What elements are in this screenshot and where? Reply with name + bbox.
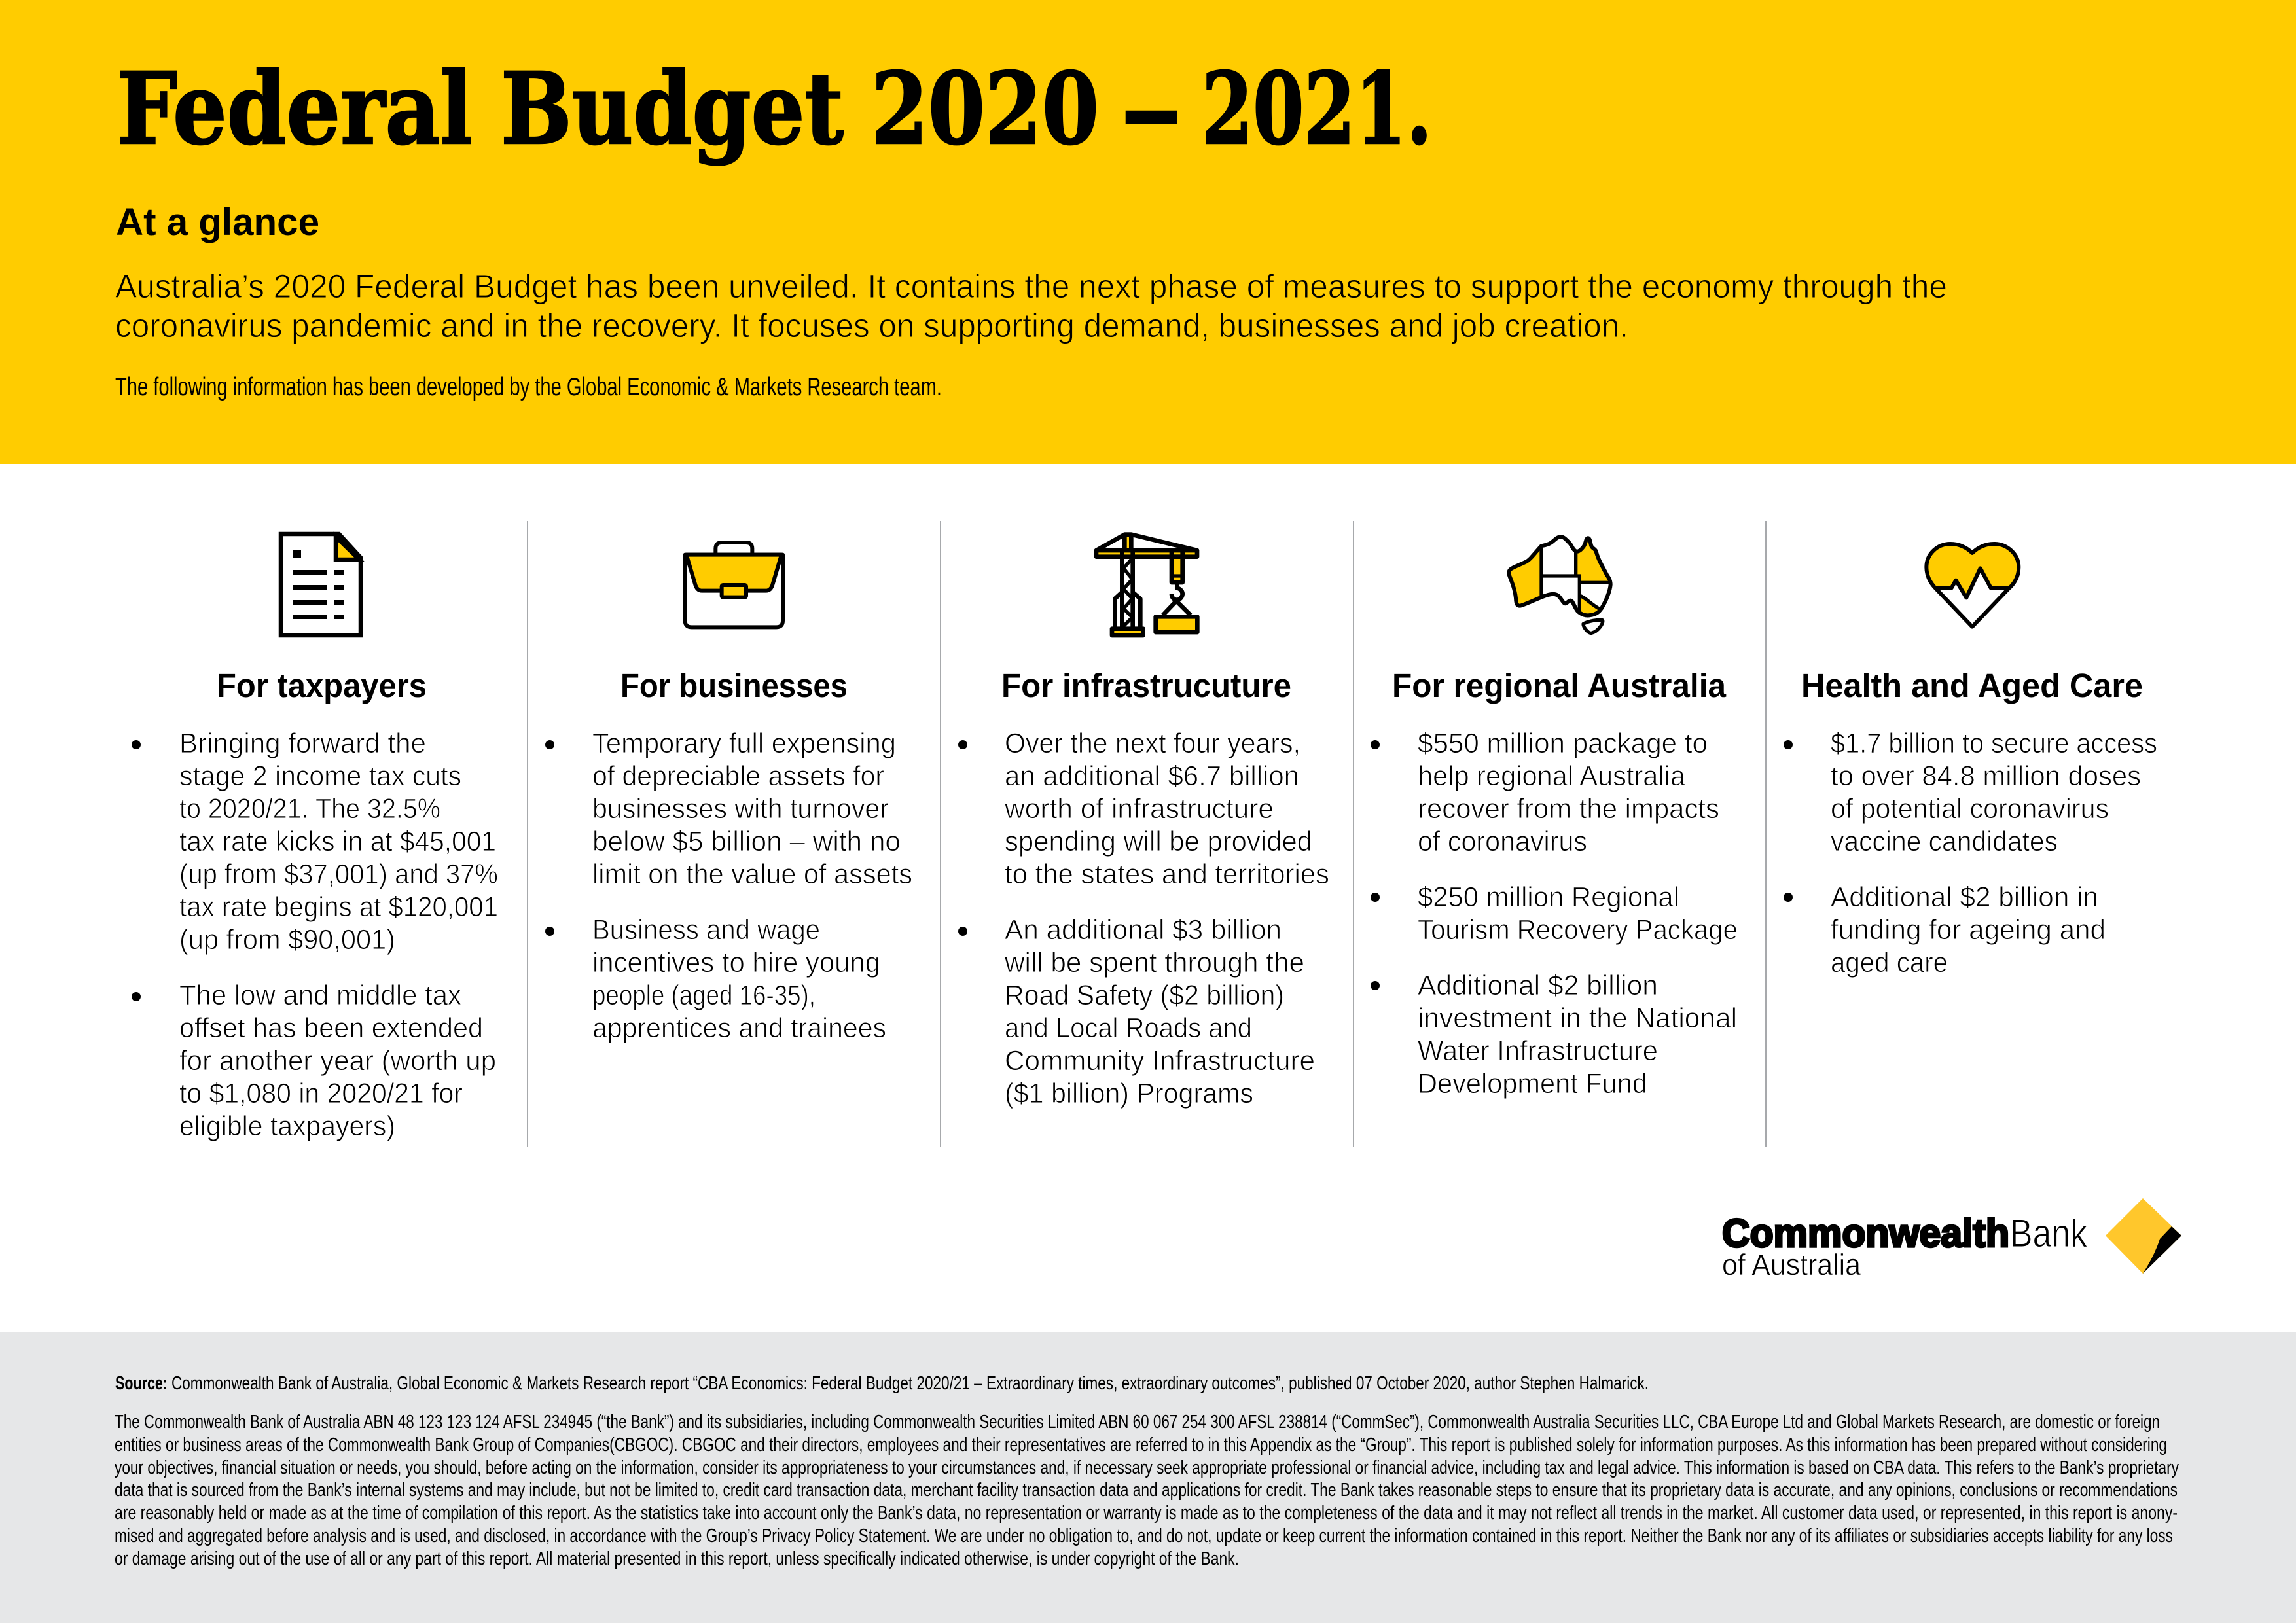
bullet list: Water Infrastructure	[1418, 1035, 1658, 1067]
bullet list: help regional Australia	[1418, 760, 1685, 792]
bullet list: spending will be provided	[1005, 826, 1312, 857]
heading: For businesses	[620, 667, 848, 704]
intro paragraph: coronavirus pandemic and in the recovery. It focuses on supporting demand, businesses and job creation.	[115, 307, 1628, 344]
bullet list: of depreciable assets for	[592, 760, 884, 792]
footer panel	[0, 1332, 2296, 1623]
legal disclaimer	[115, 1412, 2179, 1569]
bullet list: $550 million package to	[1418, 728, 1708, 759]
bullet list	[545, 728, 912, 1044]
bullet list: (up from $90,001)	[179, 924, 395, 955]
bullet list: incentives to hire young	[592, 947, 880, 978]
subtitle: At a glance	[116, 201, 319, 243]
bullet list: of coronavirus	[1418, 826, 1587, 857]
bullet list: Business and wage	[592, 914, 820, 946]
title: 2021.	[1202, 50, 1432, 167]
legal disclaimer: or damage arising out of the use of all or any part of this report. All material presented in this report, unless specifically indicated otherwise, is under copyright of the Bank.	[115, 1548, 1239, 1569]
icon: map of Australia	[1509, 537, 1611, 633]
bullet list: will be spent through the	[1004, 947, 1304, 978]
bullet list: worth of infrastructure	[1004, 793, 1274, 825]
bullet list: stage 2 income tax cuts	[179, 760, 461, 792]
bullet list: businesses with turnover	[592, 793, 889, 825]
panel: for infrastructure	[958, 535, 1329, 1109]
bullet list: apprentices and trainees	[592, 1012, 886, 1044]
bullet list: of potential coronavirus	[1831, 793, 2109, 825]
bullet list: recover from the impacts	[1418, 793, 1719, 825]
title: Federal	[117, 50, 473, 167]
bullet list: Bringing forward the	[179, 728, 426, 759]
bullet list: Tourism Recovery Package	[1418, 914, 1738, 946]
bullet list: The low and middle tax	[179, 980, 461, 1011]
bullet list: and Local Roads and	[1005, 1012, 1252, 1044]
bullet list: Temporary full expensing	[592, 728, 896, 759]
bullet list: offset has been extended	[179, 1012, 483, 1044]
bullet list: An additional $3 billion	[1005, 914, 1282, 946]
panel: for businesses	[545, 543, 912, 1044]
bullet list: to 2020/21. The 32.5%	[179, 793, 440, 825]
icon: crane with load	[1096, 535, 1197, 635]
bullet list	[1371, 728, 1738, 1099]
bullet list: aged care	[1831, 947, 1948, 978]
heading: For regional Australia	[1392, 667, 1727, 704]
attribution note: The following information has been developed by the Global Economic & Markets Research team.	[115, 373, 942, 401]
panel: for taxpayers	[132, 534, 498, 1142]
source line: Source:	[115, 1373, 168, 1394]
bullet list: $1.7 billion to secure access	[1831, 728, 2157, 759]
bullet list: Community Infrastructure	[1005, 1045, 1315, 1077]
bullet list: Additional $2 billion in	[1831, 882, 2098, 913]
icon: heart with pulse	[1926, 544, 2018, 627]
icon: document	[281, 534, 361, 635]
logo wordmark: of Australia	[1722, 1248, 1861, 1281]
icon: briefcase	[685, 543, 783, 627]
source line: Commonwealth Bank of Australia, Global Economic & Markets Research report “CBA Economics: Federal Budget 2020/21 – Extraordinary times, extraordinary outcomes”, published 07 October 2020, author Stephen Halmarick.	[171, 1373, 1649, 1394]
bullet list: funding for ageing and	[1831, 914, 2106, 946]
bullet list: tax rate begins at $120,001	[179, 891, 498, 923]
bullet list: Additional $2 billion	[1418, 970, 1658, 1001]
bullet list	[1784, 728, 2157, 978]
logo wordmark	[1722, 1211, 2088, 1281]
intro paragraph	[115, 268, 1947, 344]
panel: health and aged care	[1784, 544, 2157, 978]
bullet list: eligible taxpayers)	[179, 1111, 395, 1142]
bullet list: investment in the National	[1418, 1003, 1737, 1034]
bullet list: for another year (worth up	[179, 1045, 496, 1077]
title: –	[1120, 50, 1183, 167]
bullet list: an additional $6.7 billion	[1005, 760, 1299, 792]
bullet list: Road Safety ($2 billion)	[1005, 980, 1284, 1011]
panel: for regional Australia	[1371, 537, 1738, 1099]
bullet list: to $1,080 in 2020/21 for	[179, 1078, 463, 1109]
heading: Health and Aged Care	[1801, 667, 2143, 704]
bullet list: vaccine candidates	[1831, 826, 2058, 857]
bullet list: limit on the value of assets	[592, 859, 912, 890]
bullet list: (up from $37,001) and 37%	[179, 859, 498, 890]
logo wordmark: Bank	[2010, 1211, 2088, 1255]
title: 2020	[871, 50, 1099, 167]
bullet list: to the states and territories	[1005, 859, 1329, 890]
header banner	[0, 0, 2296, 464]
bullet list: below $5 billion – with no	[592, 826, 901, 857]
heading: For taxpayers	[217, 667, 427, 704]
bullet list: $250 million Regional	[1418, 882, 1679, 913]
logo wordmark: Commonwealth	[1722, 1211, 2009, 1255]
logo: Commonwealth Bank of Australia	[1722, 1198, 2181, 1281]
title: Budget	[501, 50, 844, 167]
bullet list: tax rate kicks in at $45,001	[179, 826, 496, 857]
bullet list: Over the next four years,	[1005, 728, 1300, 759]
bullet list: people (aged 16-35),	[592, 980, 816, 1011]
intro paragraph: Australia’s 2020 Federal Budget has been unveiled. It contains the next phase of measures to support the economy through the	[115, 268, 1947, 305]
logo diamond	[2106, 1198, 2181, 1274]
bullet list: ($1 billion) Programs	[1005, 1078, 1253, 1109]
bullet list: to over 84.8 million doses	[1831, 760, 2141, 792]
bullet list	[132, 728, 498, 1142]
bullet list: Development Fund	[1418, 1068, 1647, 1099]
heading: For infrastrucuture	[1001, 667, 1291, 704]
bullet list	[958, 728, 1329, 1109]
title	[117, 50, 1432, 167]
